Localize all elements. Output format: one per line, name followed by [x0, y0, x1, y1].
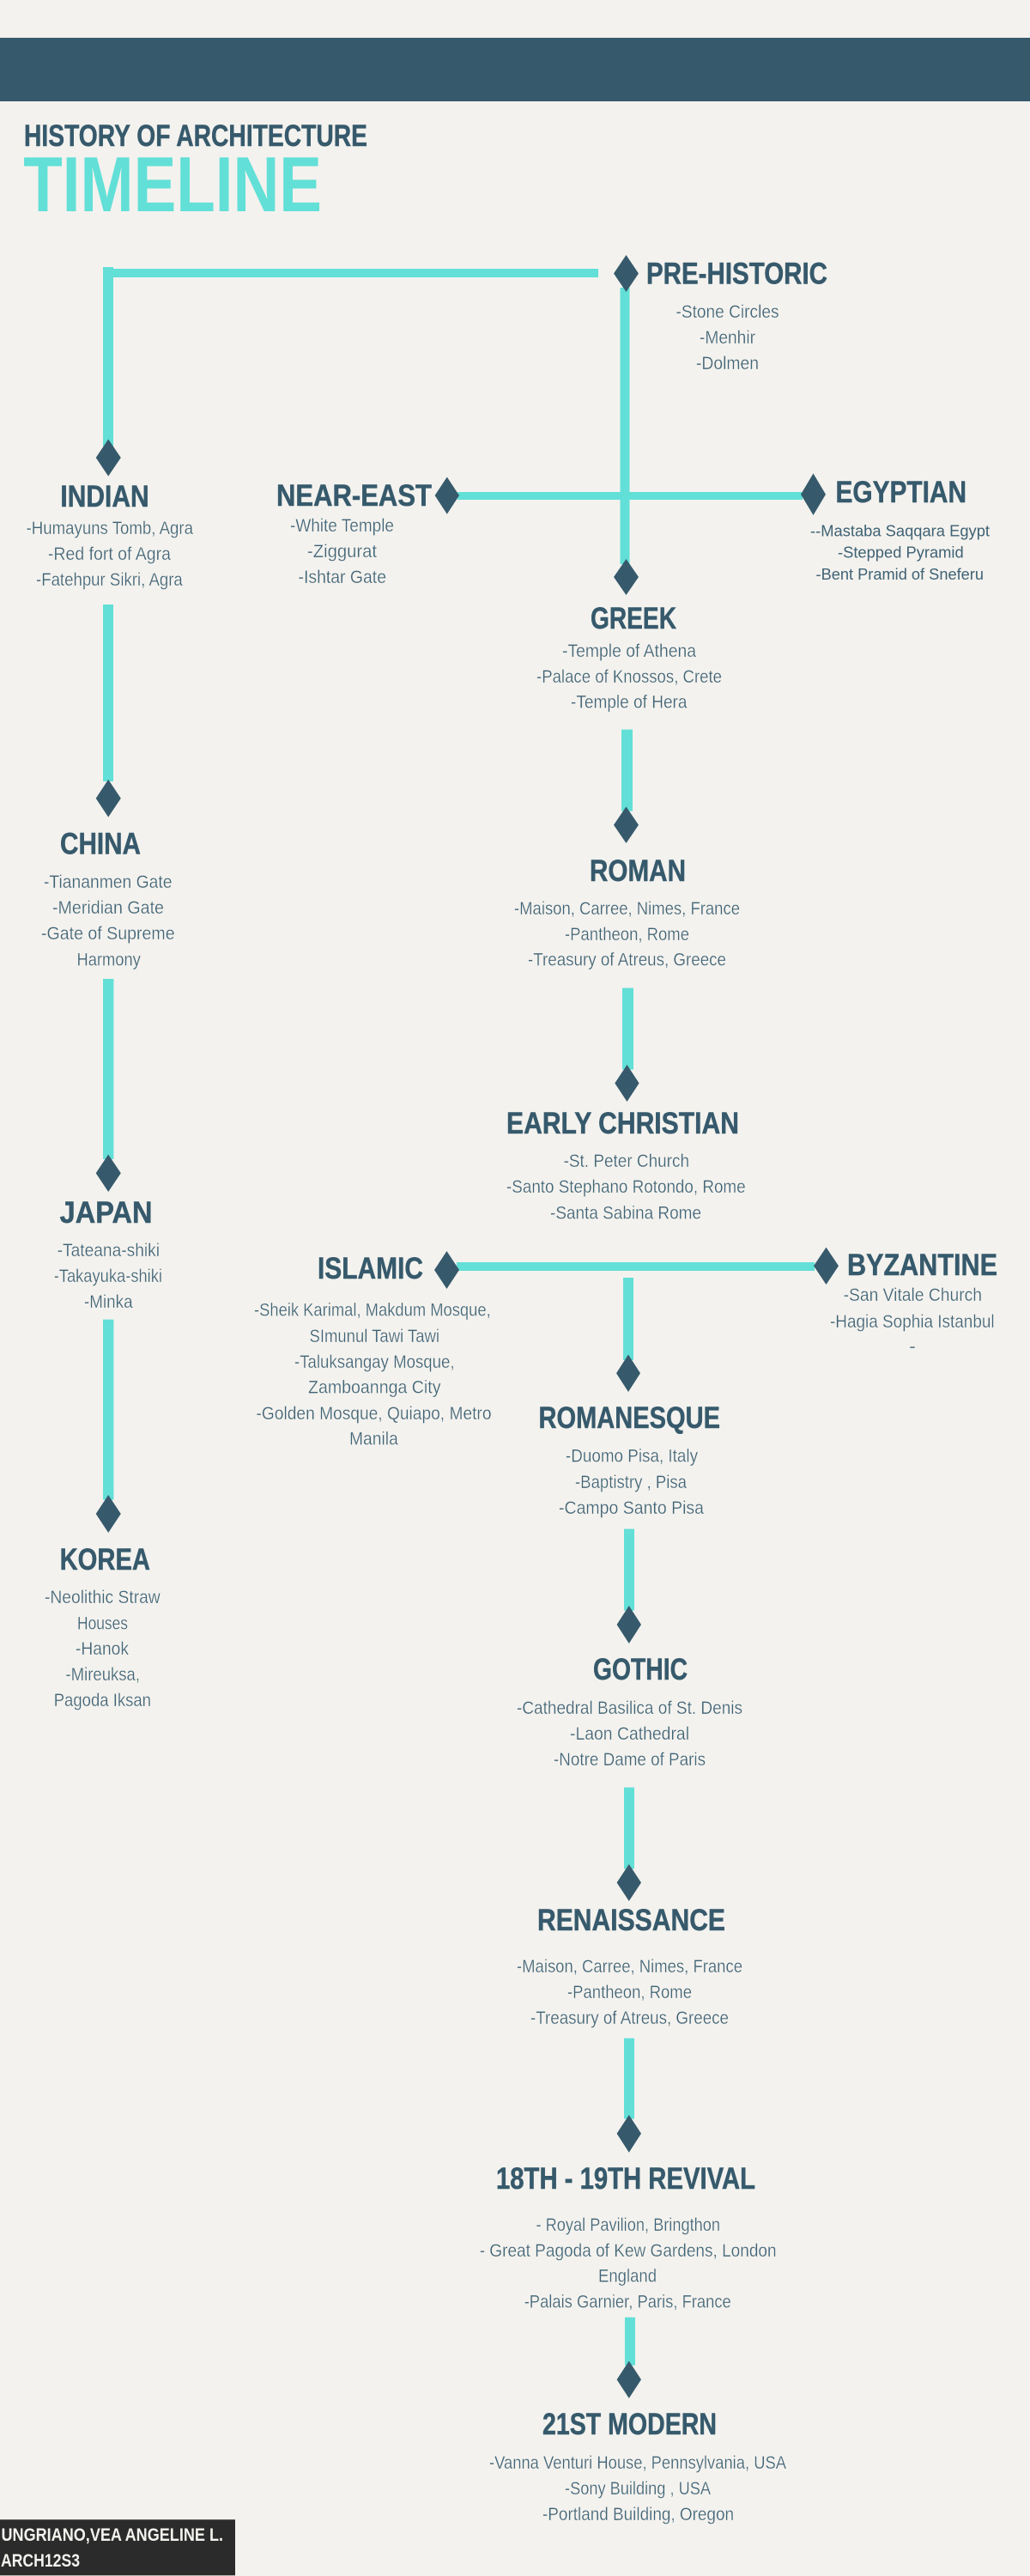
text block: -Mireuksa,: [65, 1664, 140, 1685]
icon: diamond: [614, 806, 639, 843]
connector: romanesque to gothic: [624, 1529, 634, 1611]
text block: -Pantheon, Rome: [565, 924, 689, 945]
panel: korea: [45, 1495, 161, 1710]
text block: -Temple of Athena: [562, 641, 696, 661]
text block: -Stepped Pyramid: [838, 544, 964, 562]
connector: roman to early christian: [622, 988, 633, 1070]
heading: RENAISSANCE: [537, 1904, 725, 1937]
text block: SImunul Tawi Tawi: [309, 1326, 439, 1346]
text block: [517, 1698, 742, 1770]
text block: [830, 1285, 995, 1357]
icon: diamond: [617, 1606, 641, 1643]
text block: -Treasury of Atreus, Greece: [528, 950, 726, 970]
connector: revival to modern: [625, 2318, 635, 2366]
header bar: [0, 38, 1030, 101]
heading: ISLAMIC: [318, 1252, 423, 1285]
text block: [536, 641, 722, 713]
connector: pre-historic to greek: [620, 288, 630, 564]
icon: diamond: [617, 2361, 641, 2398]
panel: roman: [514, 806, 740, 970]
text block: -Palace of Knossos, Crete: [536, 666, 722, 687]
text block: [41, 872, 175, 970]
text block: -Bent Pramid of Sneferu: [815, 566, 984, 583]
text block: [254, 1300, 492, 1449]
text block: -Campo Santo Pisa: [559, 1498, 704, 1518]
panel: indian: [27, 440, 193, 590]
title: TIMELINE: [23, 142, 322, 228]
icon: diamond: [614, 559, 639, 595]
text block: -Cathedral Basilica of St. Denis: [517, 1698, 742, 1718]
icon: diamond: [814, 1248, 839, 1285]
text block: -Baptistry , Pisa: [575, 1472, 687, 1492]
footer: author credit: UNGRIANO,VEA ANGELINE L.: [2, 2524, 223, 2545]
icon: diamond: [96, 1154, 121, 1192]
connector: japan to korea: [103, 1320, 113, 1500]
text block: -Temple of Hera: [571, 692, 688, 713]
icon: diamond: [801, 473, 826, 515]
heading: ROMAN: [590, 854, 686, 888]
text block: Houses: [77, 1613, 128, 1633]
text block: - Royal Pavilion, Bringthon: [536, 2215, 720, 2235]
icon: diamond: [434, 1251, 459, 1289]
text block: -Duomo Pisa, Italy: [566, 1446, 698, 1467]
text block: -Hagia Sophia Istanbul: [830, 1311, 995, 1332]
panel: egyptian: [801, 473, 990, 583]
icon: diamond: [96, 780, 121, 817]
text block: -Humayuns Tomb, Agra: [27, 518, 193, 538]
connector: indian to china: [103, 605, 113, 781]
connector: greek to roman: [621, 730, 633, 811]
text block: -Maison, Carree, Nimes, France: [514, 898, 740, 919]
panel: byzantine: [814, 1248, 997, 1357]
panel: renaissance: [517, 1864, 742, 2028]
footer: author credit: ARCH12S3: [1, 2550, 80, 2571]
text block: Zamboannga City: [308, 1377, 441, 1398]
text block: -Laon Cathedral: [570, 1723, 689, 1744]
text block: England: [598, 2266, 657, 2287]
panel: pre-historic: [614, 255, 827, 374]
text block: -Menhir: [700, 327, 755, 348]
panel: 21st modern: [489, 2361, 787, 2524]
text block: Harmony: [77, 950, 141, 970]
heading: PRE-HISTORIC: [646, 258, 827, 291]
text block: [27, 518, 193, 590]
heading: BYZANTINE: [847, 1249, 997, 1282]
title: HISTORY OF ARCHITECTURE: [24, 119, 367, 153]
connector: pre-historic to indian: [103, 267, 598, 447]
icon: diamond: [614, 255, 639, 292]
heading: INDIAN: [60, 480, 149, 513]
connector: china to japan: [103, 979, 113, 1159]
text block: -Gate of Supreme: [41, 923, 175, 944]
text block: -Tiananmen Gate: [44, 872, 172, 892]
text block: [480, 2215, 777, 2312]
text block: -Palais Garnier, Paris, France: [524, 2291, 731, 2312]
text block: -Meridian Gate: [52, 897, 164, 918]
text block: [489, 2452, 787, 2524]
text block: Manila: [349, 1429, 398, 1449]
panel: romanesque: [539, 1355, 720, 1518]
icon: diamond: [615, 1065, 639, 1102]
text block: -White Temple: [290, 515, 394, 536]
text block: -Taluksangay Mosque,: [294, 1352, 455, 1372]
heading: GOTHIC: [593, 1653, 688, 1686]
footer: author credit: [0, 2519, 235, 2575]
icon: diamond: [96, 1495, 121, 1533]
icon: diamond: [617, 1864, 641, 1901]
text block: [559, 1446, 704, 1518]
heading: 18TH - 19TH REVIVAL: [496, 2162, 755, 2196]
text block: -Takayuka-shiki: [54, 1266, 162, 1286]
connector: near-east to egyptian: [457, 492, 803, 500]
text block: [45, 1587, 161, 1710]
text block: [514, 898, 740, 970]
heading: GREEK: [591, 602, 676, 635]
text block: -Ziggurat: [307, 541, 377, 562]
text block: -Tateana-shiki: [58, 1240, 160, 1261]
text block: -San Vitale Church: [844, 1285, 982, 1305]
icon: diamond: [617, 2115, 641, 2153]
panel: islamic: [254, 1251, 492, 1449]
heading: EGYPTIAN: [836, 476, 966, 509]
text block: [54, 1240, 162, 1312]
text block: [810, 522, 990, 583]
connector: down to romanesque: [623, 1278, 633, 1360]
text block: [676, 301, 779, 374]
text block: -Vanna Venturi House, Pennsylvania, USA: [489, 2452, 787, 2473]
text block: -Pantheon, Rome: [567, 1982, 692, 2002]
text block: -Hanok: [76, 1638, 129, 1659]
heading: JAPAN: [60, 1196, 153, 1230]
text block: [506, 1151, 746, 1223]
text block: -Maison, Carree, Nimes, France: [517, 1956, 742, 1977]
text block: -Portland Building, Oregon: [542, 2504, 734, 2524]
text block: [517, 1956, 742, 2028]
heading: KOREA: [60, 1543, 150, 1577]
panel: near-east: [276, 477, 459, 587]
text block: -Golden Mosque, Quiapo, Metro: [256, 1403, 492, 1424]
panel: early christian: [506, 1065, 746, 1223]
heading: ROMANESQUE: [539, 1401, 720, 1435]
text block: -Santo Stephano Rotondo, Rome: [506, 1176, 746, 1197]
text block: -Santa Sabina Rome: [550, 1202, 701, 1223]
heading: NEAR-EAST: [276, 479, 432, 513]
heading: 21ST MODERN: [542, 2408, 717, 2441]
text block: --Mastaba Saqqara Egypt: [810, 522, 990, 539]
text block: -Neolithic Straw: [45, 1587, 161, 1607]
heading: EARLY CHRISTIAN: [506, 1107, 739, 1140]
panel: japan: [54, 1154, 162, 1312]
text block: -Notre Dame of Paris: [554, 1749, 706, 1770]
icon: diamond: [435, 477, 459, 514]
text block: Pagoda Iksan: [54, 1690, 151, 1710]
icon: diamond: [616, 1355, 640, 1392]
connector: gothic to renaissance: [624, 1788, 634, 1869]
panel: china: [41, 780, 175, 970]
text block: -Fatehpur Sikri, Agra: [36, 569, 183, 590]
heading: CHINA: [60, 828, 141, 861]
connector: renaissance to revival: [624, 2038, 634, 2119]
text block: -: [909, 1336, 916, 1357]
text block: -Stone Circles: [676, 301, 779, 322]
text block: -Minka: [84, 1291, 133, 1312]
icon: diamond: [96, 440, 121, 477]
text block: - Great Pagoda of Kew Gardens, London: [480, 2240, 777, 2261]
text block: -Sony Building , USA: [565, 2478, 712, 2499]
connector: islamic to byzantine: [457, 1262, 815, 1271]
panel: 18th-19th revival: [480, 2115, 777, 2312]
panel: greek: [536, 559, 722, 713]
text block: -Ishtar Gate: [299, 567, 386, 587]
text block: -Red fort of Agra: [48, 544, 171, 564]
text block: [290, 515, 394, 587]
text block: -St. Peter Church: [564, 1151, 689, 1171]
panel: gothic: [517, 1606, 742, 1770]
text block: -Dolmen: [696, 353, 759, 374]
text block: -Treasury of Atreus, Greece: [530, 2008, 729, 2028]
text block: -Sheik Karimal, Makdum Mosque,: [254, 1300, 491, 1321]
